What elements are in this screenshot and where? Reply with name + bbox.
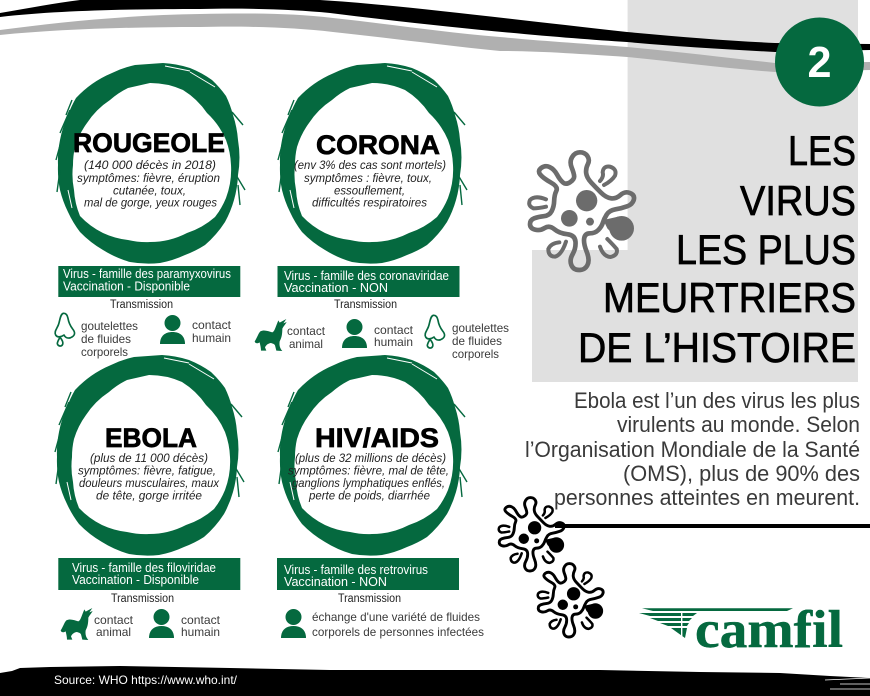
details rougeole: mal de gorge, yeux rouges [84,196,217,210]
details rougeole: symptômes: fièvre, éruption [77,171,220,185]
details corona: difficultés respiratoires [312,196,427,210]
transmission hiv: corporels de personnes infectées [312,625,484,639]
panel: corona [255,63,509,361]
intro text block: (OMS), plus de 90% des [623,461,860,486]
top brush swoosh bands [0,0,870,72]
title [578,127,856,371]
transmission corona: de fluides [452,334,502,348]
transmission rougeole: goutelettes [81,319,138,333]
details hiv: ganglions lymphatiques enflés, [292,476,445,490]
transmission hiv [281,593,484,639]
logo: camfil: camfil [695,601,843,659]
transmission ebola [61,593,221,640]
brush ring hiv [278,355,467,556]
transmission ebola: animal [96,625,131,639]
info box ebola: Vaccination - Disponible [72,573,199,587]
transmission ebola: Transmission [111,593,174,605]
info box corona [278,266,460,297]
info box rougeole: Virus - famille des paramyxovirus [63,267,231,281]
intro text block: virulents au monde. Selon [617,412,860,437]
divider line with viruses [555,524,870,528]
icon: black virus 2 [538,564,603,637]
transmission ebola: humain [181,625,220,639]
details rougeole [77,158,220,210]
panel: hiv aids [277,355,484,639]
transmission rougeole: de fluides [81,332,131,346]
intro text block: personnes atteintes en meurent. [554,485,860,510]
transmission rougeole: Transmission [110,299,173,311]
details hiv: perte de poids, diarrhée [308,488,430,502]
title: VIRUS [740,177,856,224]
panel: rougeole [55,63,245,359]
details rougeole: (140 000 décès in 2018) [84,158,216,172]
info box hiv [277,558,459,590]
icon: large grey virus [529,152,634,270]
transmission corona [255,299,509,361]
heading ebola: EBOLA [105,423,197,453]
brush ring corona [278,63,467,264]
info box ebola: Virus - famille des filoviridae [72,561,216,575]
info box rougeole [58,266,240,297]
intro text block: l’Organisation Mondiale de la Santé [525,437,860,462]
transmission rougeole: humain [192,331,231,345]
transmission corona: Transmission [334,299,397,311]
info box ebola [58,558,240,590]
transmission corona: humain [374,335,413,349]
number badge: 2 [808,38,832,87]
details ebola: de tête, gorge irritée [96,488,202,502]
transmission hiv: Transmission [338,593,401,605]
info box corona: Virus - famille des coronaviridae [284,269,449,283]
transmission ebola: contact [181,613,221,627]
details hiv: (plus de 32 millions de décès) [295,451,446,465]
intro text block [525,388,860,510]
transmission corona: contact [287,324,326,338]
grey background panel [532,0,858,382]
details corona [294,158,446,210]
brush ring ebola [55,355,244,556]
details hiv [288,451,449,502]
details ebola: symptômes: fièvre, fatigue, [78,464,216,478]
details corona: essouflement, [334,184,405,198]
details corona: (env 3% des cas sont mortels) [294,158,446,172]
details ebola: douleurs musculaires, maux [79,476,220,490]
details ebola [78,451,220,502]
title: LES [788,127,856,174]
details hiv: symptômes: fièvre, mal de tête, [288,464,449,478]
icon: black virus 1 [499,498,564,571]
transmission rougeole [55,299,232,359]
details ebola: (plus de 11 000 décès) [90,451,208,465]
transmission corona: contact [374,323,414,337]
details corona: symptômes : fièvre, toux, [304,171,432,185]
brush ring rougeole [56,63,245,264]
heading rougeole: ROUGEOLE [73,128,225,158]
info box corona: Vaccination - NON [284,281,388,295]
details rougeole: cutanée, toux, [113,184,186,198]
heading hiv: HIV/AIDS [315,423,439,453]
transmission rougeole: corporels [81,345,128,359]
transmission corona: corporels [452,347,499,361]
info box hiv: Vaccination - NON [284,575,387,589]
info box hiv: Virus - famille des retrovirus [284,563,428,577]
title: DE L’HISTOIRE [578,324,856,371]
transmission corona: animal [289,337,323,351]
source text: Source: WHO https://www.who.int/ [54,673,238,687]
transmission corona: goutelettes [452,321,509,335]
logo: camfil [639,601,843,659]
transmission ebola: contact [94,613,134,627]
transmission hiv: échange d'une variété de fluides [312,610,480,624]
info box rougeole: Vaccination - Disponible [63,280,190,294]
panel: ebola [55,355,244,640]
transmission rougeole: contact [192,318,232,332]
footer brush band [0,666,870,696]
heading corona: CORONA [316,130,440,160]
number badge [775,18,864,106]
